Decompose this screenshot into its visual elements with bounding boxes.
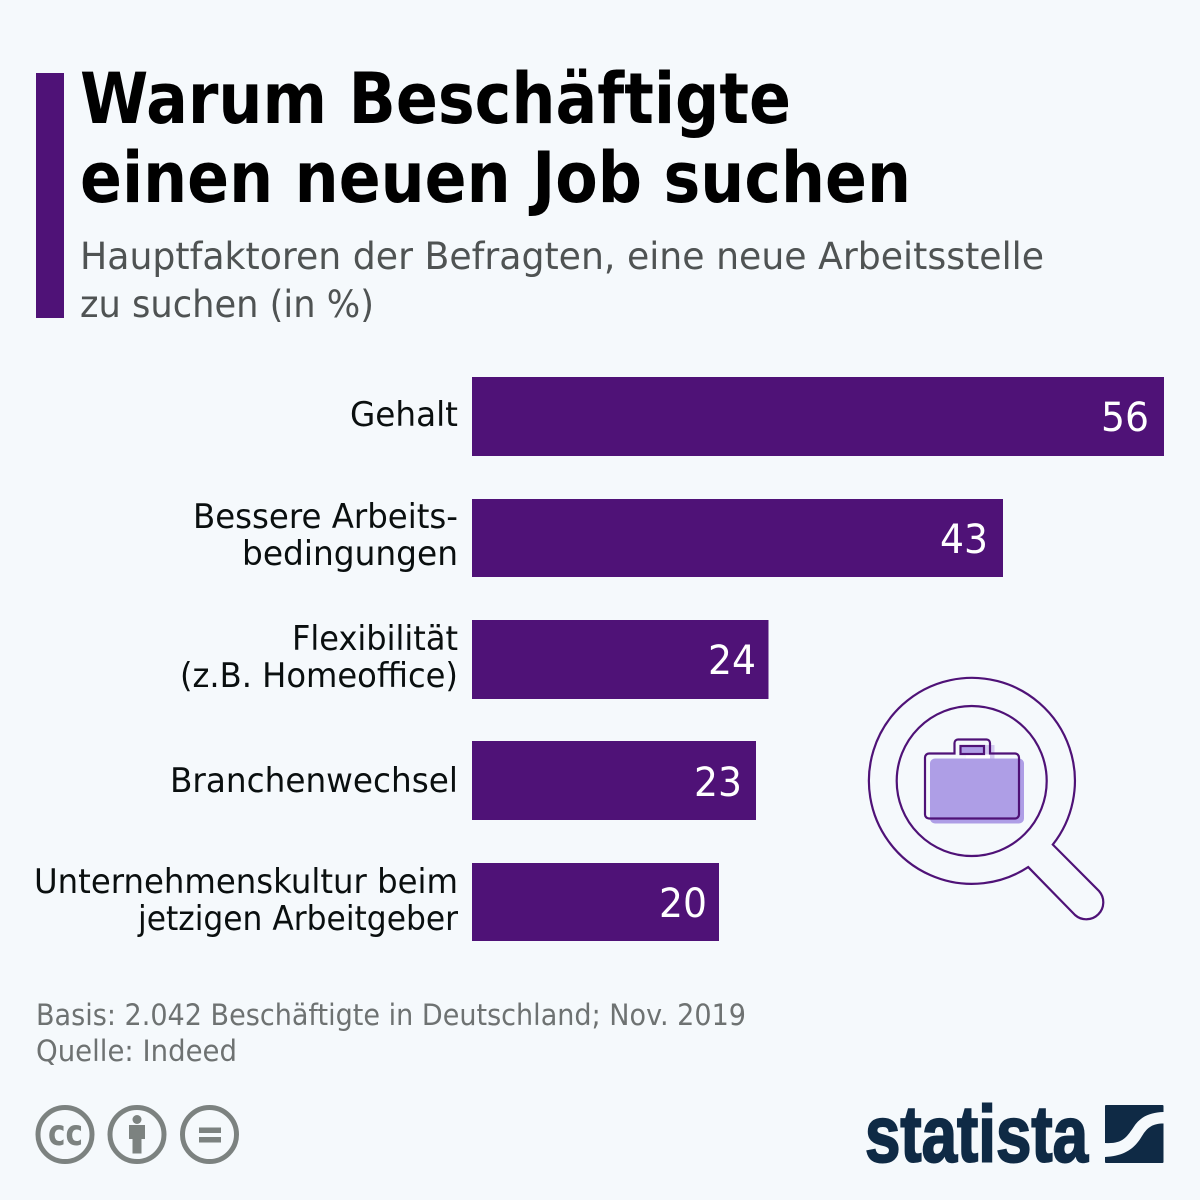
title [80, 58, 911, 219]
bar: Bessere Arbeitsbedingungen 43 [193, 497, 1003, 577]
heading accent bar [36, 73, 64, 318]
bar chart [34, 377, 1164, 941]
bar: Flexibilität 24 [180, 619, 768, 699]
bar: Unternehmenskultur 20: 20 [659, 881, 707, 927]
source note [36, 998, 746, 1068]
bar: Bessere Arbeitsbedingungen 43: Bessere Arbeits- [193, 497, 458, 537]
bar: Gehalt 56: 56 [1101, 395, 1149, 441]
icon: no derivatives [182, 1108, 236, 1162]
bar: Bessere Arbeitsbedingungen 43: 43 [940, 517, 988, 563]
icon: attribution [110, 1108, 164, 1162]
bar: Bessere Arbeitsbedingungen 43: bedingungen [242, 534, 458, 574]
bar: Flexibilität 24: (z.B. Homeoffice) [180, 656, 458, 696]
bar: Flexibilität 24: Flexibilität [292, 619, 458, 659]
bar: Unternehmenskultur 20: Unternehmenskultur beim [34, 862, 458, 902]
bar: Branchenwechsel 23: Branchenwechsel [170, 761, 458, 801]
title: einen neuen Job suchen [80, 137, 911, 219]
bar: Branchenwechsel 23 [170, 741, 756, 820]
subtitle [80, 235, 1044, 326]
icon: creative commons: cc [48, 1113, 83, 1154]
icon: magnifying glass with briefcase [869, 678, 1103, 919]
icon: creative commons [38, 1108, 92, 1162]
bar: Gehalt 56: Gehalt [350, 395, 458, 435]
subtitle: zu suchen (in %) [80, 283, 374, 326]
source note: Basis: 2.042 Beschäftigte in Deutschland; Nov. 2019 [36, 998, 746, 1032]
bar: Gehalt 56 [350, 377, 1164, 456]
subtitle: Hauptfaktoren der Befragten, eine neue Arbeitsstelle [80, 235, 1044, 278]
statista logo: statista [865, 1090, 1088, 1178]
source note: Quelle: Indeed [36, 1034, 237, 1068]
bar: Flexibilität 24: 24 [708, 638, 756, 684]
title: Warum Beschäftigte [80, 58, 791, 140]
bar: Unternehmenskultur 20: jetzigen Arbeitgeber [137, 899, 458, 939]
bar: Branchenwechsel 23: 23 [694, 760, 742, 806]
bar: Unternehmenskultur 20 [34, 862, 719, 941]
